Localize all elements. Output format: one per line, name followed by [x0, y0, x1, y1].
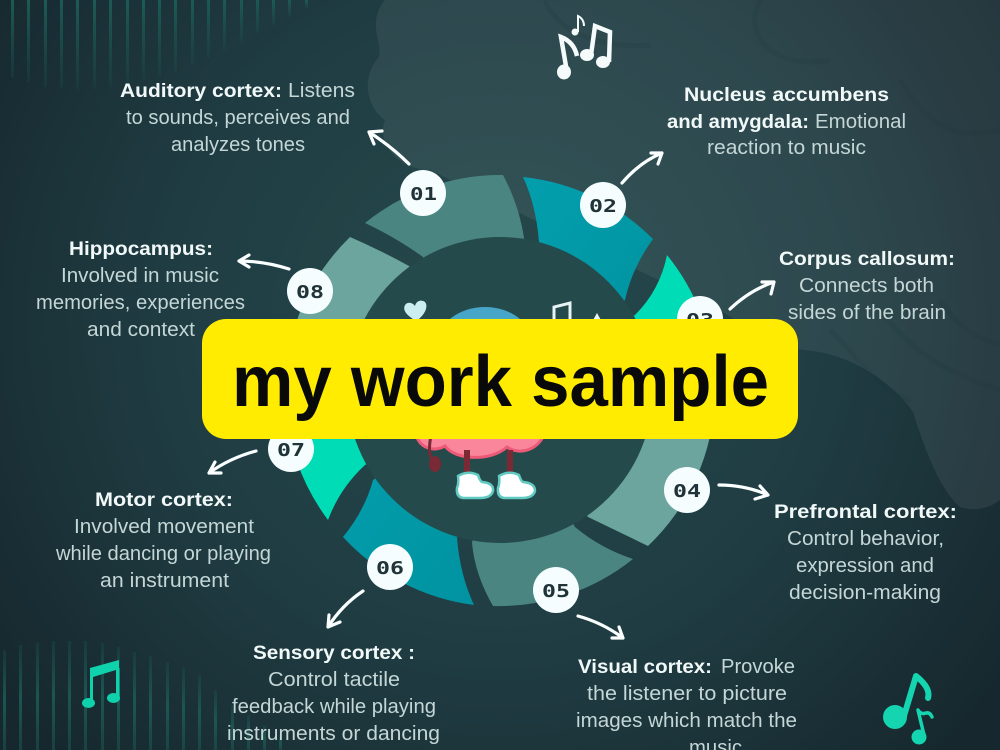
- text: prefrontal cortex: [774, 501, 957, 604]
- arrow 04: [719, 485, 768, 499]
- text: visual cortex: [576, 656, 797, 750]
- icon: teal music note, bottom left: [82, 660, 120, 708]
- arrow 02: [622, 153, 662, 183]
- text: visual cortex: images which match the: [576, 710, 797, 732]
- text: motor cortex: Motor cortex:: [95, 489, 233, 511]
- text: auditory cortex: Auditory cortex:: [120, 80, 282, 102]
- text: hippocampus: Involved in music: [61, 265, 219, 287]
- text: hippocampus: Hippocampus:: [69, 238, 213, 260]
- ring segment 05: [472, 390, 633, 606]
- number badge 01: [400, 170, 446, 216]
- text: motor cortex: [55, 489, 271, 592]
- text: motor cortex: while dancing or playing: [55, 543, 271, 565]
- text: auditory cortex: Listens: [288, 80, 355, 102]
- brain lobes: [415, 430, 546, 457]
- text: nucleus accumbens: Nucleus accumbens: [684, 84, 889, 106]
- ring segment 07: [285, 390, 500, 520]
- brain character: [404, 301, 602, 498]
- equalizer bars: top left: [11, 0, 308, 90]
- banner: my work sample: my work sample: [232, 342, 769, 422]
- cord: [430, 436, 431, 458]
- text: hippocampus: and context: [87, 319, 195, 341]
- arrow 03: [730, 282, 774, 309]
- text: prefrontal cortex: decision-making: [789, 582, 941, 604]
- number badge 08: 08: [296, 282, 324, 303]
- text: auditory cortex: to sounds, perceives and: [126, 107, 350, 129]
- text: hippocampus: [36, 238, 245, 341]
- text: corpus callosum: Corpus callosum:: [779, 248, 955, 270]
- text: nucleus accumbens: and amygdala:: [667, 111, 809, 133]
- number badge 07: 07: [277, 440, 305, 461]
- text: prefrontal cortex: expression and: [796, 555, 934, 577]
- ring segment 06: [343, 390, 500, 605]
- text: corpus callosum: [779, 248, 955, 324]
- text: nucleus accumbens: reaction to music: [707, 137, 866, 159]
- text: auditory cortex: [120, 80, 355, 156]
- text: sensory cortex: Control tactile: [268, 669, 400, 691]
- number badge 01: 01: [410, 184, 437, 205]
- text: sensory cortex: [227, 642, 440, 745]
- text: corpus callosum: Connects both: [799, 275, 934, 297]
- arrow 06: [328, 591, 363, 627]
- background brain silhouette: [368, 0, 1000, 509]
- number badge 05: [533, 567, 579, 613]
- number badge 03: [677, 296, 723, 342]
- icon: small triangle: [592, 313, 602, 322]
- number badge 07: [268, 426, 314, 472]
- icon: teal music notes, bottom right: [883, 676, 932, 744]
- text: auditory cortex: analyzes tones: [171, 134, 305, 156]
- number badge 08: [287, 268, 333, 314]
- text: visual cortex: the listener to picture: [587, 683, 787, 705]
- text: visual cortex: Visual cortex:: [578, 656, 712, 678]
- arrow 08: [239, 255, 289, 269]
- text: sensory cortex: feedback while playing: [232, 696, 436, 718]
- text: motor cortex: an instrument: [100, 570, 229, 592]
- number badge 02: 02: [589, 196, 617, 217]
- number badge 03: 03: [686, 310, 714, 331]
- banner: my work sample: [202, 319, 798, 439]
- text: prefrontal cortex: Prefrontal cortex:: [774, 501, 957, 523]
- equalizer bars: bottom left: [3, 641, 282, 750]
- text: prefrontal cortex: Control behavior,: [787, 528, 944, 550]
- text: corpus callosum: sides of the brain: [788, 302, 946, 324]
- text: nucleus accumbens: Emotional: [815, 111, 906, 133]
- text: visual cortex: Provoke: [721, 656, 795, 678]
- icon: heart: [404, 301, 426, 321]
- shoes: [457, 473, 535, 498]
- ring segment 02: [500, 177, 653, 390]
- ring diagram: [285, 175, 715, 606]
- ring segment 04: [500, 390, 715, 546]
- arrow 07: [209, 451, 256, 473]
- centre disk: [347, 237, 653, 543]
- ring segment 03: [500, 255, 715, 390]
- text: nucleus accumbens: [667, 84, 906, 159]
- text: sensory cortex: instruments or dancing: [227, 723, 440, 745]
- number badge 06: 06: [376, 558, 404, 579]
- text: motor cortex: Involved movement: [74, 516, 254, 538]
- number badge 04: [664, 467, 710, 513]
- text: hippocampus: memories, experiences: [36, 292, 245, 314]
- number badge 02: [580, 182, 626, 228]
- icon: white music notes: [557, 16, 610, 80]
- ring segment 08: [285, 237, 500, 390]
- icon: headphone dome: [437, 307, 533, 383]
- icon: small music note: [554, 303, 570, 322]
- arrow 05: [578, 616, 623, 638]
- text: sensory cortex: Sensory cortex :: [253, 642, 415, 664]
- arrow 01: [369, 131, 409, 164]
- ring segment 01: [365, 175, 524, 390]
- number badge 05: 05: [542, 581, 570, 602]
- number badge 04: 04: [673, 481, 701, 502]
- legs: [467, 450, 510, 478]
- number badge 06: [367, 544, 413, 590]
